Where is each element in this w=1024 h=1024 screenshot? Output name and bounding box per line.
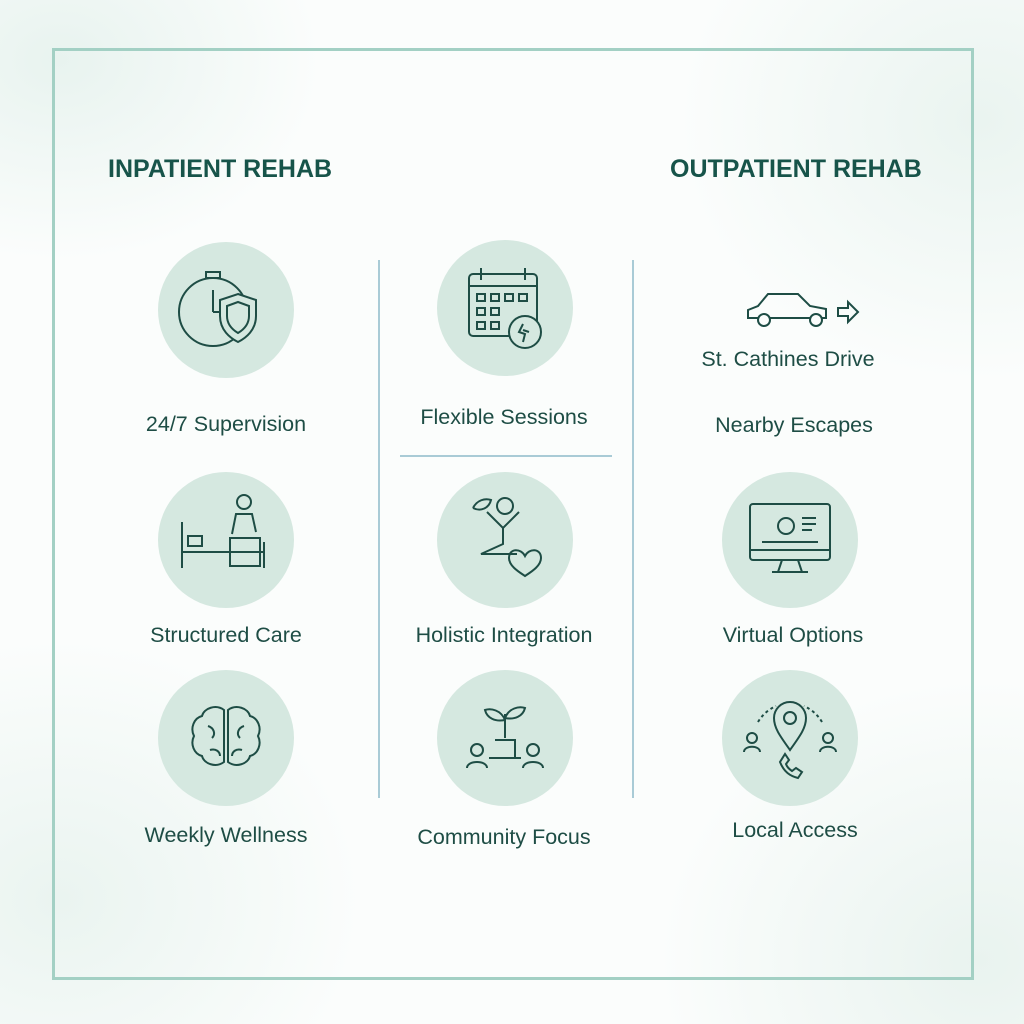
icon: monitor bbox=[722, 472, 858, 608]
icon: car bbox=[747, 293, 860, 327]
title: outpatient: OUTPATIENT REHAB bbox=[670, 155, 922, 183]
icon: location bbox=[722, 670, 858, 806]
icon: bed and doctor bbox=[158, 472, 294, 608]
label: Community Focus bbox=[417, 825, 591, 849]
divider left bbox=[378, 260, 380, 798]
icon: calendar bbox=[437, 240, 573, 376]
icon: yoga heart bbox=[437, 472, 573, 608]
title: inpatient: INPATIENT REHAB bbox=[108, 155, 332, 183]
label: Structured Care bbox=[150, 623, 302, 647]
label: Local Access bbox=[732, 818, 858, 842]
label: drive: St. Cathines Drive bbox=[701, 347, 875, 371]
icon: stopwatch shield bbox=[158, 242, 294, 378]
divider right bbox=[632, 260, 634, 798]
label: 24/7 Supervision bbox=[146, 412, 306, 436]
label: Flexible Sessions bbox=[420, 405, 588, 429]
divider middle bbox=[400, 455, 612, 457]
label: Holistic Integration bbox=[416, 623, 592, 647]
label: Virtual Options bbox=[723, 623, 863, 647]
label: nearby: Nearby Escapes bbox=[715, 413, 873, 437]
icon: plant community bbox=[437, 670, 573, 806]
icon: brain bbox=[158, 670, 294, 806]
label: Weekly Wellness bbox=[145, 823, 307, 847]
